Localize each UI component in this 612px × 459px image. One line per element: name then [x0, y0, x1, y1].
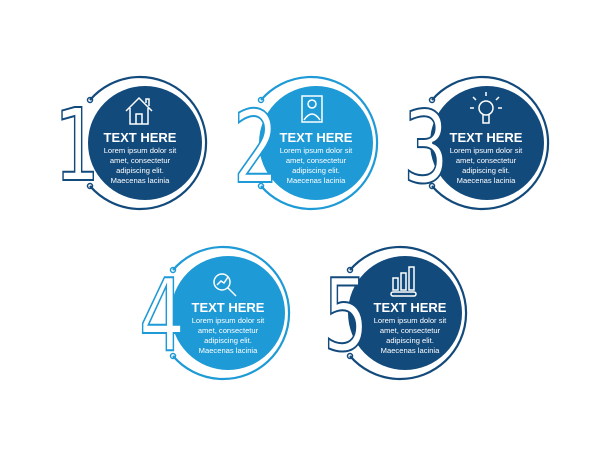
body 1: Lorem ipsum dolor sit: [104, 146, 177, 155]
icon: bar chart: [391, 267, 416, 296]
panel: step 5: [323, 247, 466, 379]
icon: lightbulb: [470, 92, 502, 123]
numeral 4: 4: [139, 257, 185, 374]
body 4: adipiscing elit.: [204, 336, 252, 345]
numeral 1: 1: [54, 87, 100, 204]
heading 5: TEXT HERE: [374, 300, 447, 315]
heading 4: TEXT HERE: [192, 300, 265, 315]
icon: person: [302, 96, 322, 122]
body 3: [450, 146, 523, 185]
body 4: Maecenas lacinia: [199, 346, 258, 355]
heading 2: TEXT HERE: [280, 130, 353, 145]
numeral 3: 3: [403, 89, 449, 206]
body 5: Maecenas lacinia: [381, 346, 440, 355]
body 1: amet, consectetur: [110, 156, 171, 165]
icon: magnifier chart: [214, 274, 236, 296]
body 1: Maecenas lacinia: [111, 176, 170, 185]
panel: step 1: [54, 77, 206, 209]
body 1: adipiscing elit.: [116, 166, 164, 175]
heading 3: TEXT HERE: [450, 130, 523, 145]
body 3: adipiscing elit.: [462, 166, 510, 175]
panel: step 2: [233, 77, 377, 209]
heading 1: TEXT HERE: [104, 130, 177, 145]
body 2: [280, 146, 353, 185]
body 3: Lorem ipsum dolor sit: [450, 146, 523, 155]
body 5: [374, 316, 447, 355]
body 3: amet, consectetur: [456, 156, 517, 165]
panel: step 4: [139, 247, 289, 379]
body 2: amet, consectetur: [286, 156, 347, 165]
numeral 5: 5: [323, 257, 369, 374]
body 4: Lorem ipsum dolor sit: [192, 316, 265, 325]
body 2: Lorem ipsum dolor sit: [280, 146, 353, 155]
body 2: adipiscing elit.: [292, 166, 340, 175]
icon: house: [126, 98, 152, 124]
body 5: amet, consectetur: [380, 326, 441, 335]
body 3: Maecenas lacinia: [457, 176, 516, 185]
body 5: Lorem ipsum dolor sit: [374, 316, 447, 325]
body 5: adipiscing elit.: [386, 336, 434, 345]
numeral 2: 2: [233, 89, 279, 206]
body 1: [104, 146, 177, 185]
panel: step 3: [403, 77, 548, 209]
body 2: Maecenas lacinia: [287, 176, 346, 185]
body 4: amet, consectetur: [198, 326, 259, 335]
body 4: [192, 316, 265, 355]
